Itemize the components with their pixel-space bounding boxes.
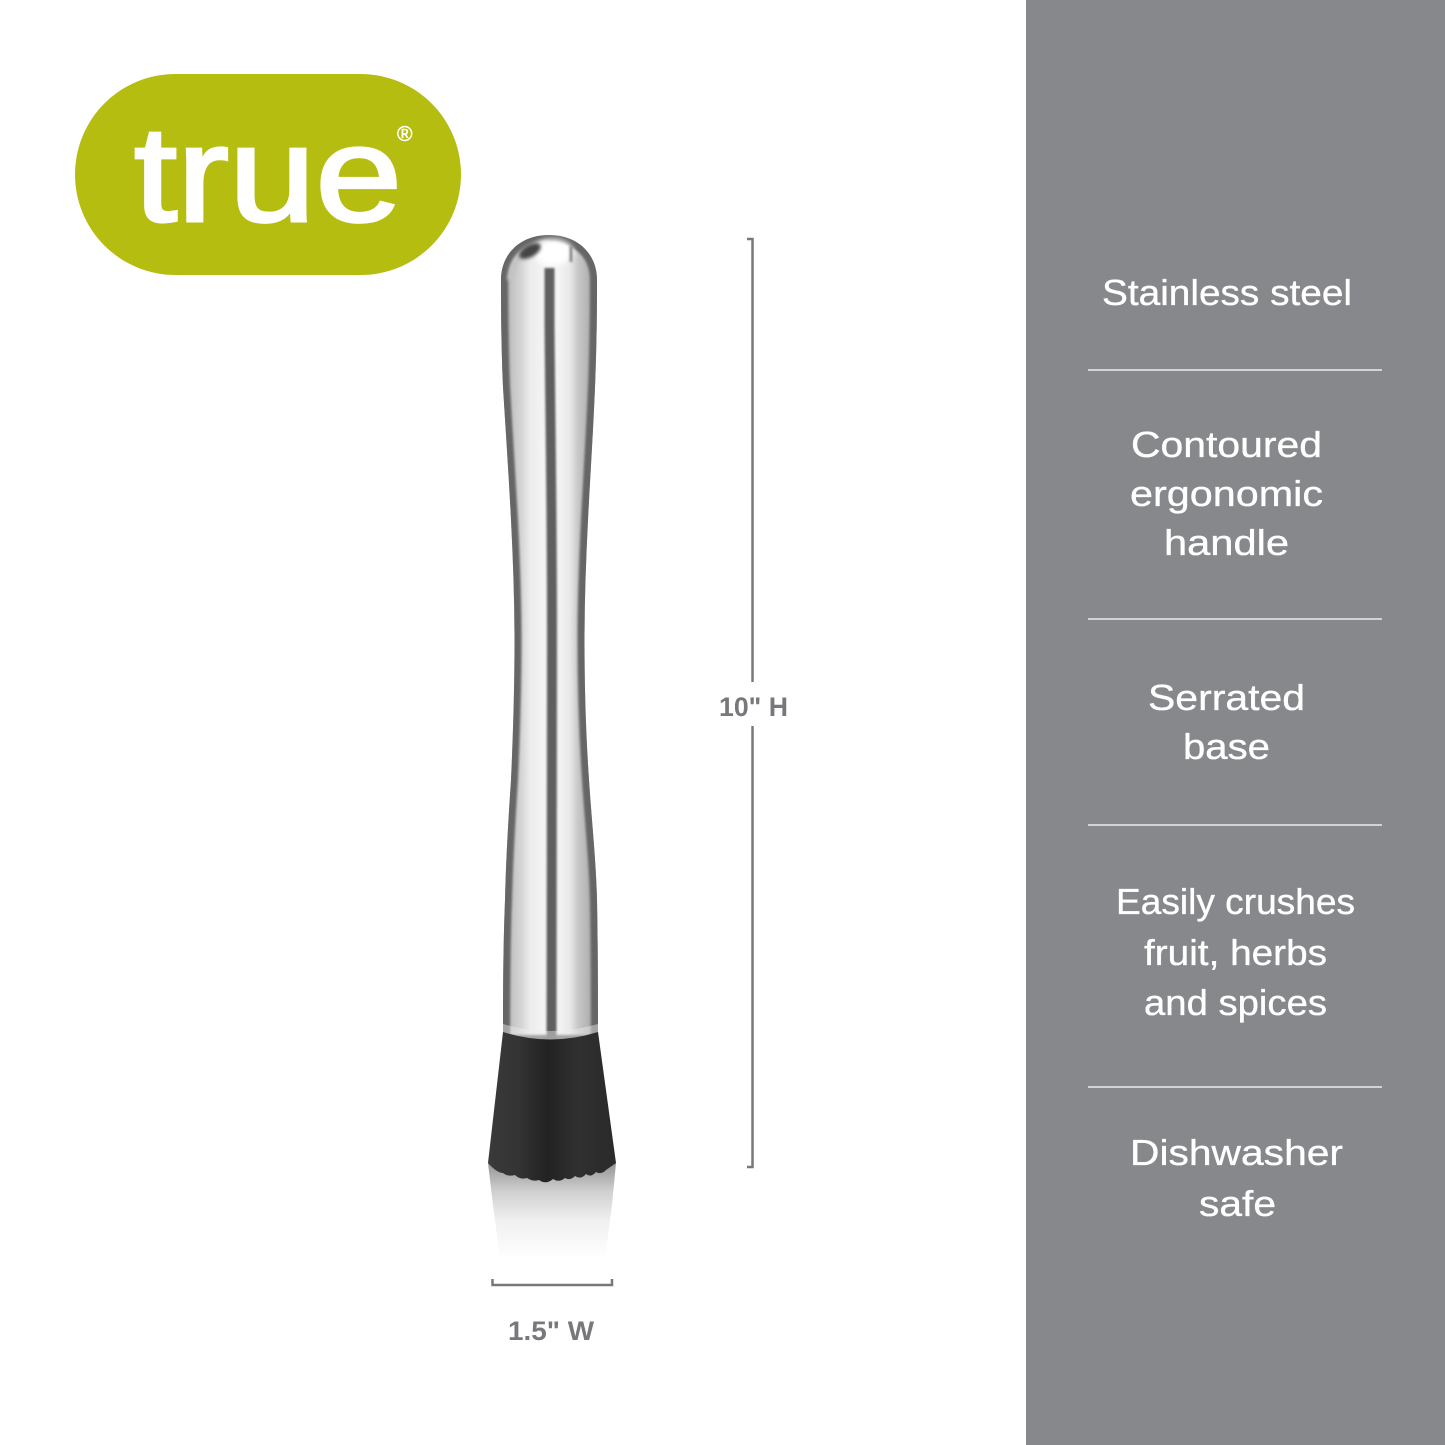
feature: serrated base <box>1148 677 1305 767</box>
feature: dishwasher safe: safe <box>1199 1183 1276 1224</box>
feature: dishwasher safe <box>1130 1132 1343 1224</box>
dimension: height bracket: 10" H <box>719 692 788 722</box>
feature: contoured ergonomic handle: handle <box>1164 522 1289 563</box>
feature: serrated base: Serrated <box>1148 677 1305 718</box>
feature: contoured ergonomic handle: ergonomic <box>1130 473 1323 514</box>
panel: features <box>1026 0 1445 1445</box>
feature: easily crushes <box>1116 881 1355 1023</box>
feature: stainless steel: Stainless steel <box>1102 272 1352 313</box>
feature: serrated base: base <box>1183 726 1270 767</box>
feature: dishwasher safe: Dishwasher <box>1130 1132 1343 1173</box>
logo: true <box>75 74 461 275</box>
feature: contoured ergonomic handle: Contoured <box>1131 424 1322 465</box>
logo: true: true <box>134 98 402 250</box>
feature: easily crushes: fruit, herbs <box>1144 932 1327 973</box>
steel handle <box>501 235 598 1040</box>
feature: easily crushes: and spices <box>1144 982 1327 1023</box>
product: stainless steel muddler <box>488 230 616 1258</box>
logo: true: ® <box>397 123 413 146</box>
dimension: width bracket: 1.5" W <box>508 1316 595 1346</box>
feature: easily crushes: Easily crushes <box>1116 881 1355 922</box>
rubber serrated base <box>488 1032 616 1182</box>
base reflection <box>488 1163 616 1258</box>
dimension: height bracket <box>719 239 788 1167</box>
feature: contoured ergonomic handle <box>1130 424 1323 563</box>
dimension: width bracket <box>492 1279 612 1346</box>
